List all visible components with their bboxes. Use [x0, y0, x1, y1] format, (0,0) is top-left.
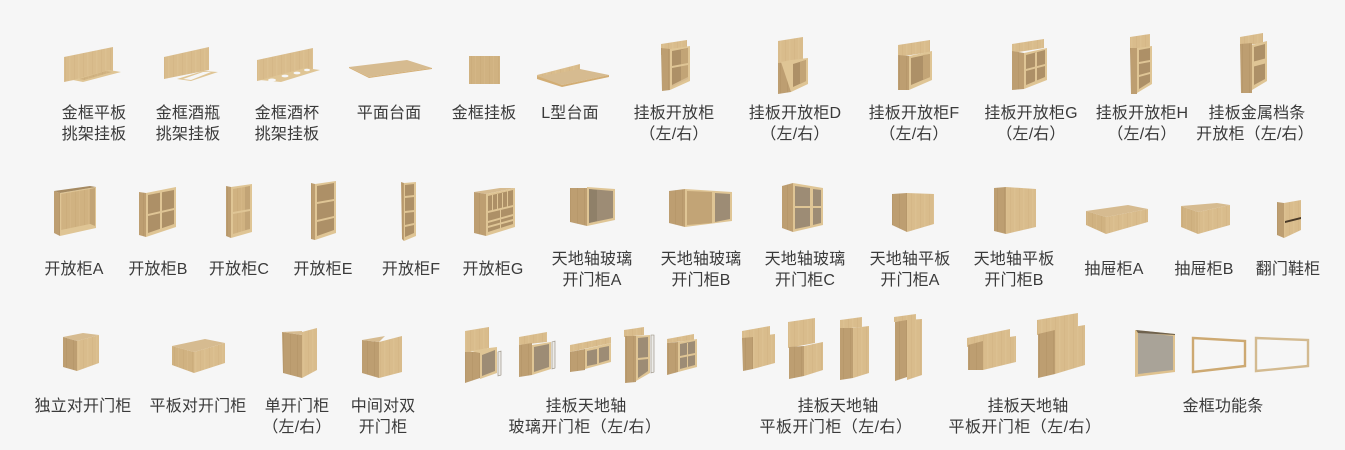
label: 开放柜C: [209, 260, 269, 278]
icon: cabinet with metal bar: [1240, 33, 1267, 93]
icon: flat tabletop: [349, 60, 432, 78]
label: （左/右）: [262, 418, 332, 436]
label: 开门柜B: [671, 271, 731, 289]
label: 金框功能条: [1183, 397, 1263, 415]
item: 挂板天地轴平板开门柜 (wide): [949, 313, 1101, 436]
item: 天地轴平板开门柜A: [870, 193, 950, 289]
label: 天地轴玻璃: [661, 251, 741, 268]
label: 开放柜B: [128, 260, 188, 278]
icon: panel with glass rack: [257, 48, 320, 82]
item: 开放柜B: [128, 187, 188, 278]
label: 挂板开放柜G: [984, 105, 1078, 122]
icon: flat door cabinet A: [892, 193, 934, 232]
label: 开放柜（左/右）: [1196, 125, 1314, 143]
item: 挂板开放柜D: [749, 37, 841, 143]
item: 天地轴玻璃开门柜B: [661, 189, 741, 289]
icon: panel with bottle rack: [164, 47, 218, 81]
label: 平板开门柜（左/右）: [949, 418, 1101, 436]
icon: flip door shoe cabinet: [1277, 200, 1301, 238]
icon: wall open cabinet F: [898, 40, 932, 90]
label: 玻璃开门柜（左/右）: [509, 418, 661, 436]
icon: two wide wall flat door cabinets: [967, 313, 1085, 378]
label: 挂板天地轴: [988, 398, 1068, 415]
label: 开放柜G: [462, 260, 524, 278]
label: （左/右）: [760, 125, 830, 143]
label: 金框平板: [62, 105, 126, 122]
label: 挂板开放柜F: [869, 105, 959, 122]
item: 中间对双开门柜: [351, 336, 415, 436]
icon: three metal frame strips: [1135, 330, 1308, 377]
item: 挂板开放柜G: [984, 39, 1078, 143]
icon: open cabinet E: [311, 181, 336, 240]
item: 挂板天地轴玻璃开门柜: [465, 327, 697, 436]
label: 平板对开门柜: [150, 397, 246, 415]
item: 金框酒瓶挑架挂板: [156, 47, 220, 143]
item: L型台面: [537, 64, 609, 122]
item: 独立对开门柜: [35, 333, 131, 415]
icon: open cabinet F: [401, 182, 416, 241]
item: 平板对开门柜: [150, 339, 246, 415]
item: 挂板金属档条开放柜: [1196, 33, 1314, 143]
icon: four wall flat door cabinets: [742, 314, 922, 381]
label: 天地轴平板: [974, 251, 1054, 268]
label: 平板开门柜（左/右）: [760, 418, 912, 436]
label: 开门柜C: [775, 271, 835, 289]
item: 抽屉柜B: [1174, 203, 1234, 278]
icon: drawer cabinet A: [1086, 205, 1148, 234]
label: 挂板开放柜H: [1096, 105, 1188, 122]
item: 挂板开放柜F: [869, 40, 959, 143]
icon: narrow wall open cabinet: [1130, 34, 1152, 94]
icon: single door cabinet: [282, 328, 317, 378]
item: 挂板开放柜: [634, 40, 714, 143]
label: 挂板开放柜: [634, 105, 714, 122]
label: 抽屉柜B: [1174, 260, 1234, 278]
label: 挂板天地轴: [546, 398, 626, 415]
icon: open cabinet C: [226, 184, 252, 238]
item: 天地轴平板开门柜B: [974, 187, 1054, 289]
label: 天地轴平板: [870, 251, 950, 268]
label: 挂板天地轴: [798, 398, 878, 415]
label: 开门柜A: [562, 271, 622, 289]
label: （左/右）: [1107, 125, 1177, 143]
label: 开放柜A: [44, 260, 104, 278]
label: 开门柜A: [880, 271, 940, 289]
icon: five wall glass door cabinets: [465, 327, 697, 383]
label: 开门柜B: [984, 271, 1044, 289]
label: 挑架挂板: [62, 125, 126, 143]
icon: drawer cabinet B: [1181, 203, 1230, 234]
label: 天地轴玻璃: [765, 251, 845, 268]
icon: standalone double door cabinet: [63, 333, 99, 371]
icon: glass door cabinet C: [782, 183, 823, 232]
icon: glass door cabinet B: [669, 189, 732, 227]
item: 开放柜E: [293, 181, 353, 278]
icon: wall open cabinet: [661, 40, 690, 91]
label: 金框挂板: [452, 104, 516, 122]
icon: open cabinet B: [139, 187, 176, 237]
icon: L tabletop: [537, 64, 609, 87]
item: 挂板天地轴平板开门柜: [742, 314, 922, 436]
label: 开放柜F: [382, 260, 440, 278]
icon: flat door cabinet B: [994, 187, 1036, 234]
label: 天地轴玻璃: [552, 251, 632, 268]
label: 平面台面: [357, 104, 421, 122]
item: 金框平板挑架挂板: [62, 47, 126, 143]
icon: open cabinet A: [54, 186, 96, 236]
icon: square panel: [469, 56, 500, 84]
item: 开放柜C: [209, 184, 269, 278]
item: 单开门柜: [262, 328, 332, 436]
label: 翻门鞋柜: [1256, 260, 1320, 278]
label: 单开门柜: [265, 398, 329, 415]
item: 开放柜G: [462, 188, 524, 278]
label: 挂板金属档条: [1209, 105, 1305, 122]
label: 金框酒瓶: [156, 105, 220, 122]
label: 开门柜: [359, 418, 407, 436]
label: （左/右）: [996, 125, 1066, 143]
label: 抽屉柜A: [1084, 260, 1144, 278]
item: 挂板开放柜H: [1096, 34, 1188, 143]
item: 抽屉柜A: [1084, 205, 1148, 278]
label: L型台面: [541, 104, 599, 122]
item: 天地轴玻璃开门柜A: [552, 187, 632, 289]
icon: flat double door cabinet: [172, 339, 225, 373]
icon: panel with flat shelf: [64, 47, 121, 82]
icon: open cabinet G with file slots: [474, 188, 515, 236]
item: 金框挂板: [452, 56, 516, 122]
icon: glass door cabinet A: [570, 187, 615, 226]
item: 平面台面: [349, 60, 432, 122]
label: 开放柜E: [293, 260, 353, 278]
label: （左/右）: [639, 125, 709, 143]
label: 挑架挂板: [156, 125, 220, 143]
label: 挂板开放柜D: [749, 105, 841, 122]
label: （左/右）: [879, 125, 949, 143]
icon: wall open cabinet G with grid: [1012, 39, 1047, 90]
item: 天地轴玻璃开门柜C: [765, 183, 845, 289]
label: 金框酒杯: [255, 105, 319, 122]
icon: center double door cabinet: [362, 336, 402, 378]
label: 独立对开门柜: [35, 397, 131, 415]
item: 金框酒杯挑架挂板: [255, 48, 320, 143]
icon: wall open cabinet D: [778, 37, 808, 94]
item: 翻门鞋柜: [1256, 200, 1320, 278]
item: 开放柜A: [44, 186, 104, 278]
item: 开放柜F: [382, 182, 440, 278]
item: 金框功能条: [1135, 330, 1308, 415]
label: 挑架挂板: [255, 125, 319, 143]
label: 中间对双: [351, 398, 415, 415]
